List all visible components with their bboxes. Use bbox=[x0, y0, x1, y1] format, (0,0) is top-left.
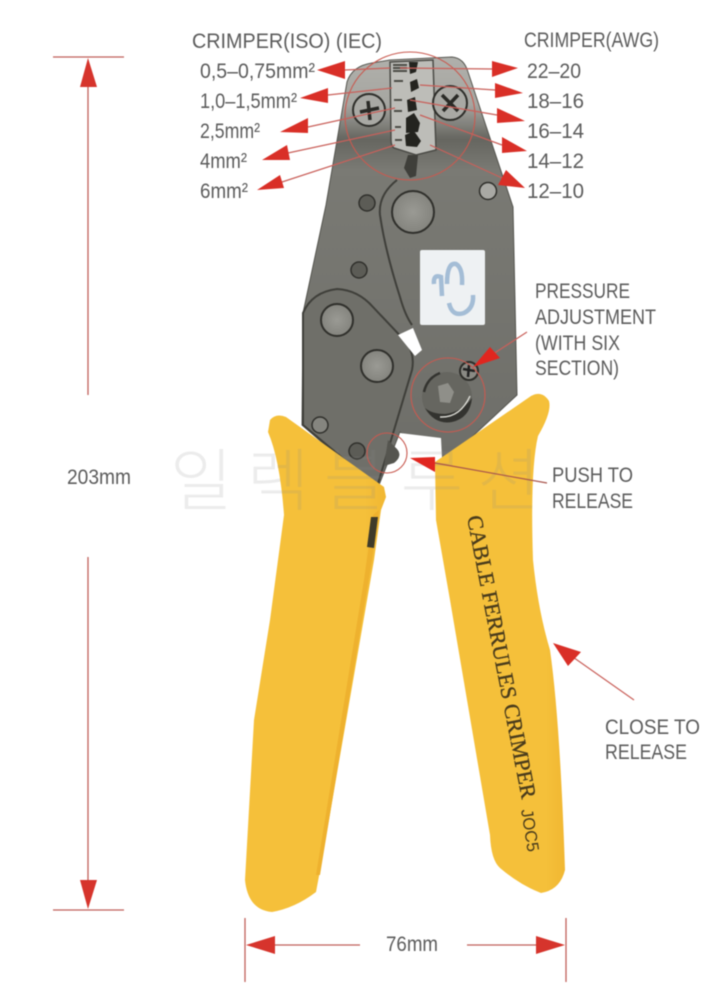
jaw slot bbox=[390, 60, 436, 178]
crimp tooth cavities bbox=[405, 62, 421, 147]
pressure adjustment wheel bbox=[422, 372, 472, 422]
ISO size 1.0-1.5: 1,0–1,5mm² bbox=[200, 90, 297, 113]
AWG 22-20: 22–20 bbox=[527, 60, 581, 83]
ISO size 4: 4mm² bbox=[200, 150, 247, 173]
handle imprint: model: JOC5 bbox=[517, 808, 543, 853]
ISO size 6: 6mm² bbox=[200, 180, 248, 203]
red highlight circle: jaw bbox=[345, 52, 475, 180]
AWG heading: CRIMPER(AWG) bbox=[524, 29, 659, 52]
callout: close to release bbox=[553, 643, 700, 764]
handle imprint: product name: CABLE FERRULES CRIMPER bbox=[462, 513, 542, 801]
left handle bbox=[245, 416, 386, 912]
callout text line 4: SECTION) bbox=[535, 357, 619, 380]
AWG arrows bbox=[400, 61, 527, 188]
main pivot rivet bbox=[392, 191, 434, 233]
AWG 18-16: 18–16 bbox=[527, 90, 584, 113]
brand label bbox=[420, 250, 485, 325]
callout text line 2: RELEASE bbox=[552, 490, 633, 513]
width dimension bbox=[245, 918, 566, 982]
pivot divider curve bbox=[380, 180, 412, 325]
red highlight circle: release latch bbox=[367, 433, 407, 473]
height dimension bbox=[53, 57, 131, 910]
rivet bbox=[361, 350, 393, 382]
ISO size 0.5-0.75: 0,5–0,75mm² bbox=[200, 60, 315, 83]
lower left plate bbox=[303, 289, 413, 487]
ISO sizes column bbox=[192, 30, 382, 203]
right handle bbox=[435, 394, 565, 893]
AWG 12-10: 12–10 bbox=[527, 180, 584, 203]
AWG sizes column bbox=[524, 29, 659, 203]
callout text line 2: RELEASE bbox=[605, 741, 687, 764]
callout: pressure adjustment bbox=[473, 280, 656, 380]
release latch bbox=[384, 440, 399, 466]
ISO arrows bbox=[257, 61, 395, 190]
ISO heading: CRIMPER(ISO) (IEC) bbox=[192, 30, 382, 53]
AWG 16-14: 16–14 bbox=[527, 120, 584, 143]
AWG 14-12: 14–12 bbox=[527, 150, 584, 173]
handle notch bbox=[367, 517, 378, 548]
callout text line 1: PRESSURE bbox=[535, 280, 630, 303]
red highlight circle: adjustment wheel bbox=[411, 358, 485, 432]
inner edge strip bbox=[316, 510, 379, 875]
rivet bbox=[321, 304, 353, 336]
adjustment screw bbox=[460, 362, 478, 380]
white gap in the plate bbox=[398, 328, 422, 356]
crimp marks bbox=[393, 65, 407, 140]
right screw bbox=[433, 86, 467, 120]
width label: 76mm bbox=[386, 933, 438, 956]
ISO size 2.5: 2,5mm² bbox=[200, 120, 260, 143]
callout text line 1: PUSH TO bbox=[552, 464, 633, 487]
white gap between the plates bbox=[378, 433, 442, 530]
crimper tool illustration bbox=[245, 52, 565, 912]
callout text line 2: ADJUSTMENT bbox=[535, 306, 656, 329]
small rivets bbox=[312, 182, 496, 459]
height label: 203mm bbox=[67, 466, 131, 489]
watermark: 일렉블루션 bbox=[170, 444, 540, 520]
callout text line 1: CLOSE TO bbox=[605, 716, 700, 739]
metal head back plate bbox=[302, 57, 517, 490]
jaw neck bbox=[404, 155, 418, 178]
callout text line 3: (WITH SIX bbox=[535, 332, 620, 355]
left screw bbox=[353, 94, 385, 126]
callout: push to release bbox=[410, 457, 633, 513]
